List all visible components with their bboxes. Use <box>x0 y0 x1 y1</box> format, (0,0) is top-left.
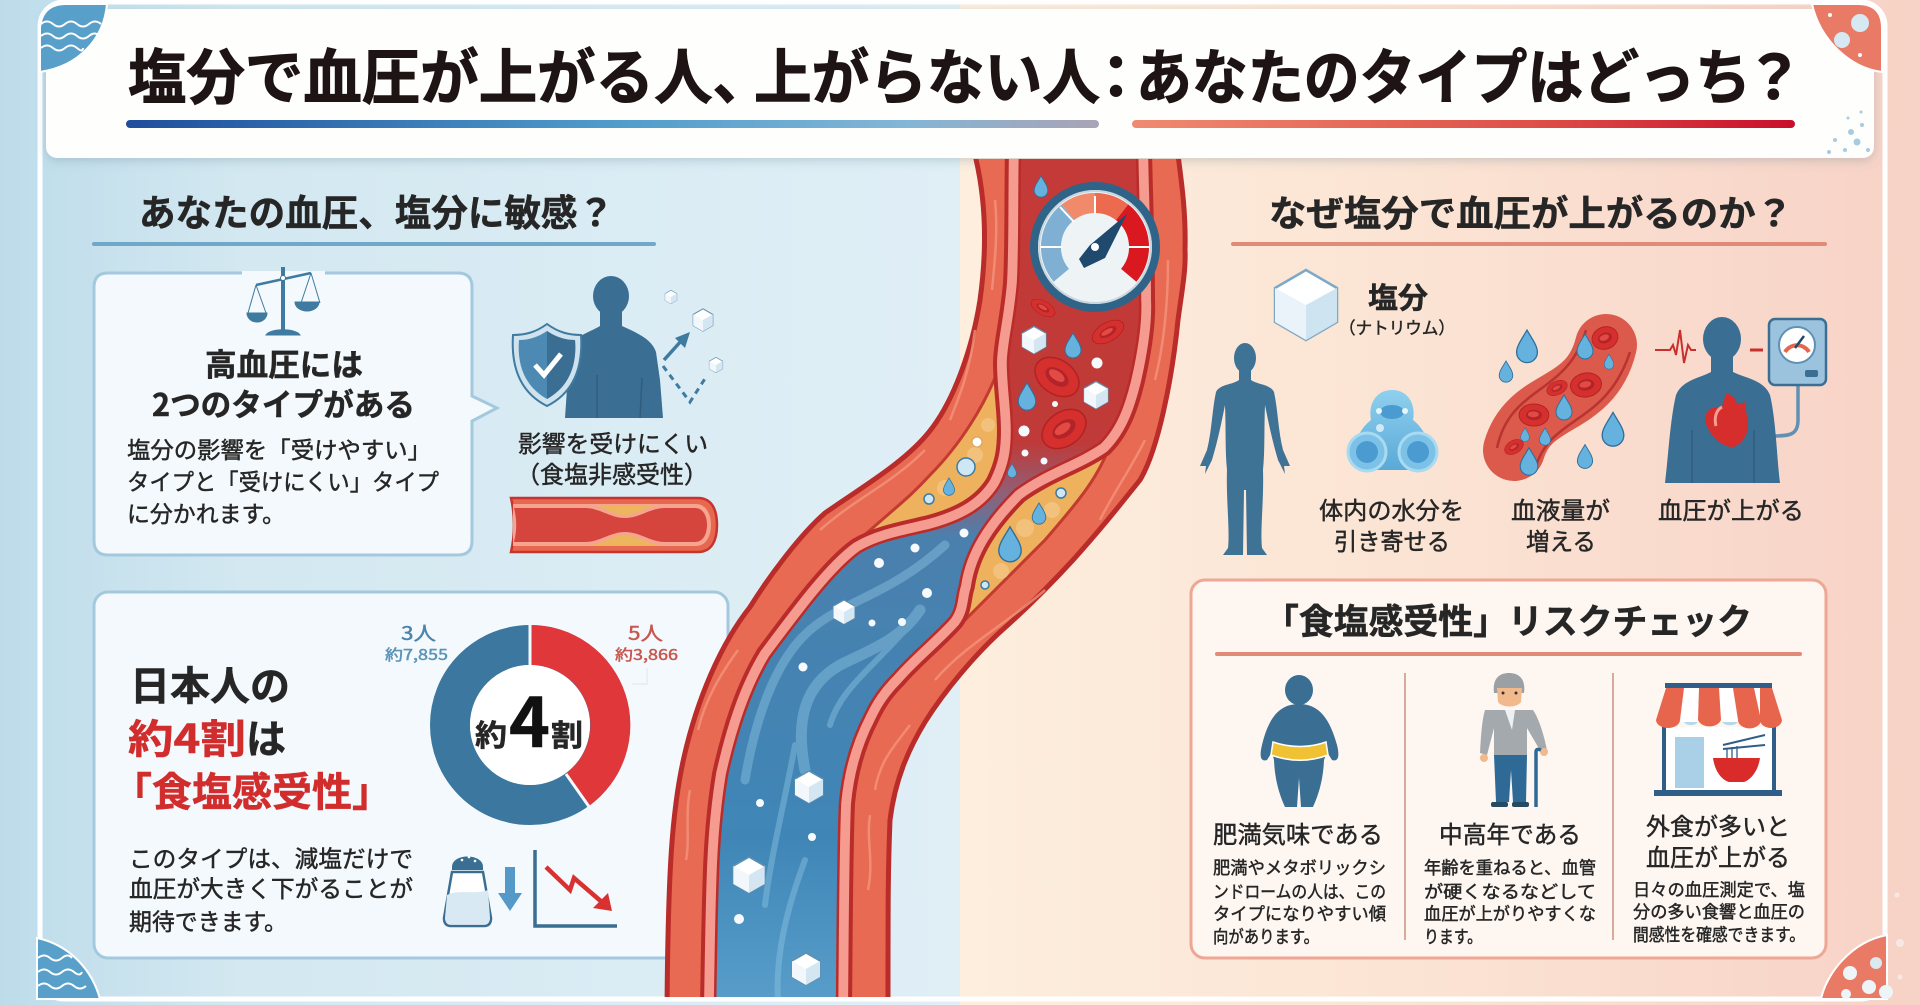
label: blood volume: 増える <box>1526 522 1596 557</box>
label: attract water: 体内の水分を <box>1319 491 1464 526</box>
column: eating out <box>1633 683 1805 947</box>
stat heading: 「食塩感受性」 <box>112 760 392 818</box>
label: non sensitive: 影響を受けにくい <box>518 425 708 459</box>
plaque blobs <box>937 418 1060 579</box>
label: non sensitive <box>516 425 708 490</box>
icon: blood vessel with water <box>1497 323 1630 475</box>
title: 上がらない人 <box>754 30 1100 117</box>
icon: person with shield <box>513 276 723 418</box>
risk label <box>1646 807 1790 873</box>
gauge <box>1034 186 1156 308</box>
icon: salt shaker <box>444 856 491 926</box>
title underline: red <box>1132 120 1795 128</box>
risk text: 血圧が上がりやすくな <box>1424 901 1596 926</box>
panel: 40 percent <box>94 592 728 958</box>
title: 塩分で血圧が上がる人、 <box>128 30 771 117</box>
water drops <box>1008 176 1081 478</box>
corner: top-right red bubbles <box>1812 4 1882 72</box>
risk text: 分の多い食響と血圧の <box>1633 899 1805 924</box>
plaque particles <box>924 437 1066 589</box>
risk heading: 「食塩感受性」リスクチェック <box>1264 594 1752 645</box>
risk label: 外食が多いと <box>1646 807 1790 842</box>
risk text <box>1213 855 1386 949</box>
column: obesity <box>1213 675 1386 949</box>
icon: down arrow <box>498 867 522 911</box>
left heading: あなたの血圧、塩分に敏感？ <box>139 183 614 237</box>
donut label: red <box>615 619 678 684</box>
red blood cells <box>1030 299 1124 450</box>
header card <box>46 9 1874 158</box>
panel: two types <box>94 267 497 555</box>
stat heading: は <box>246 707 286 765</box>
label: salt: 塩分 <box>1368 275 1428 317</box>
stat body: 期待できます。 <box>129 903 287 937</box>
donut label: blue <box>385 619 448 665</box>
title: あなたのタイプはどっち <box>1136 30 1751 117</box>
icon: salt cube <box>1275 270 1337 340</box>
plaque: left <box>866 378 997 532</box>
title: ？ <box>1744 30 1804 117</box>
column: age <box>1424 673 1596 949</box>
label: attract water <box>1319 491 1464 557</box>
icon: obese figure <box>1261 675 1338 807</box>
stat body: このタイプは、減塩だけで <box>129 840 413 874</box>
donut chart: 4 <box>509 668 550 767</box>
risk label: 肥満気味である <box>1213 815 1383 850</box>
donut chart <box>450 624 610 808</box>
wall streaks <box>686 200 1168 890</box>
stat body: 血圧が大きく下がることが <box>129 870 413 904</box>
label: blood volume <box>1511 491 1610 557</box>
risk text: タイプになりやすい傾 <box>1213 901 1386 926</box>
icon: elderly man <box>1480 673 1548 807</box>
icon: body silhouette <box>1200 343 1290 555</box>
stat body <box>129 840 413 937</box>
label: salt <box>1339 275 1455 339</box>
corner: bottom-left blue waves <box>37 938 100 999</box>
card heading: 高血圧には <box>205 340 363 385</box>
donut chart: 割 <box>551 711 583 755</box>
risk text: 間感性を確感できます。 <box>1633 922 1805 947</box>
plaque: right <box>965 456 1107 622</box>
decorative dots <box>1827 110 1870 154</box>
donut label: blue: 約7,855 <box>385 644 448 665</box>
icon: water molecule <box>1348 390 1437 471</box>
icon: restaurant <box>1654 683 1782 796</box>
panel: two types: タイプと「受けにくい」タイプ <box>127 463 439 497</box>
risk text: が硬くなるなどして <box>1424 879 1596 904</box>
artery wall <box>667 155 1185 1005</box>
stat heading <box>112 654 392 818</box>
stat heading: 約4割 <box>128 707 246 765</box>
background: peach half <box>960 0 1920 1005</box>
donut label: blue: 3人 <box>401 619 436 646</box>
icon: falling chart <box>535 850 617 926</box>
icon: person with heart and monitor <box>1655 317 1826 483</box>
label: pressure rises: 血圧が上がる <box>1658 491 1804 526</box>
lumen lining <box>715 150 1140 1005</box>
title <box>128 30 1804 117</box>
risk text: 肥満やメタボリックシ <box>1213 855 1386 880</box>
blood flow streaks <box>745 545 945 1000</box>
salt particles <box>734 358 1102 924</box>
panel: two types: 2つのタイプがある <box>152 380 415 425</box>
risk text <box>1633 877 1805 947</box>
panel: risk check <box>1191 580 1826 958</box>
risk text <box>1424 855 1596 949</box>
risk text: ンドロームの人は、この <box>1213 879 1386 904</box>
label: attract water: 引き寄せる <box>1334 522 1450 557</box>
risk text: 日々の血圧測定で、塩 <box>1633 877 1805 902</box>
risk text: 向があります。 <box>1213 924 1319 949</box>
risk label: 中高年である <box>1439 815 1581 850</box>
artery illustration <box>667 150 1185 1005</box>
stat heading: 日本人の <box>130 654 290 712</box>
label: salt: （ナトリウム） <box>1339 314 1455 339</box>
icon: small artery <box>511 498 717 552</box>
title underline: blue <box>126 120 1099 128</box>
donut label: red: 約3,866 <box>615 644 678 665</box>
panel: two types: に分かれます。 <box>127 495 285 529</box>
donut label: red: 5人 <box>628 619 663 646</box>
corner: top-left blue waves <box>40 4 107 72</box>
corner: bottom-right red bubbles <box>1821 892 1904 999</box>
right heading: なぜ塩分で血圧が上がるのか？ <box>1269 185 1793 237</box>
salt cubes <box>733 326 1108 985</box>
background: blue half <box>0 0 960 1005</box>
donut chart: 約 <box>475 711 507 755</box>
risk text: ります。 <box>1424 924 1482 949</box>
label: non sensitive: （食塩非感受性） <box>516 455 708 490</box>
title: ： <box>1086 30 1146 117</box>
risk text: 年齢を重ねると、血管 <box>1424 855 1596 880</box>
icon: balance scale <box>247 267 320 335</box>
label: blood volume: 血液量が <box>1511 491 1610 526</box>
risk label: 血圧が上がる <box>1646 838 1790 873</box>
card body: 塩分の影響を「受けやすい」 <box>127 431 431 465</box>
